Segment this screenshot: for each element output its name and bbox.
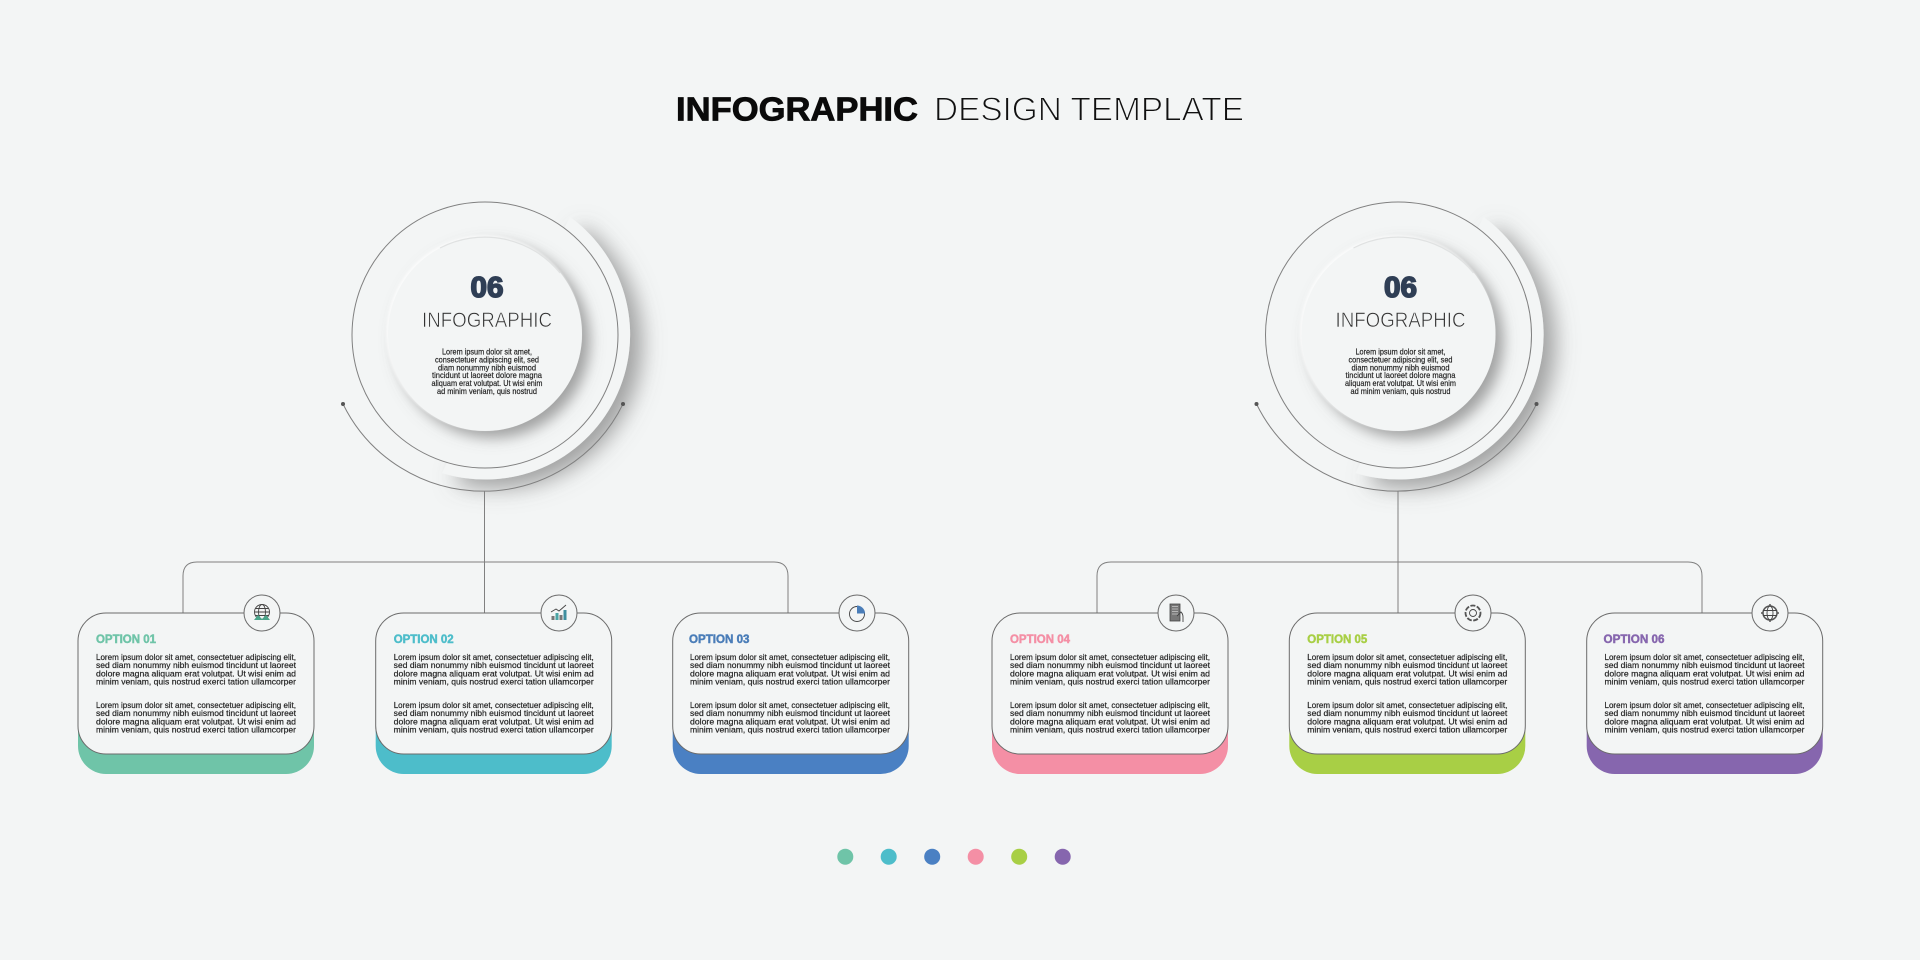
option text: minim veniam, quis nostrud exerci tation ullamcorper <box>96 677 296 687</box>
option text: minim veniam, quis nostrud exerci tation ullamcorper <box>1604 677 1805 687</box>
circle text: aliquam erat volutpat. Ut wisi enim <box>432 379 543 388</box>
icon: globe <box>244 595 280 631</box>
option text: minim veniam, quis nostrud exerci tation ullamcorper <box>690 725 890 735</box>
option text: Lorem ipsum dolor sit amet, consectetuer adipiscing elit, <box>394 652 594 662</box>
legend dots <box>837 849 1071 865</box>
option text: minim veniam, quis nostrud exerci tation ullamcorper <box>1307 677 1507 687</box>
icon: gear ring <box>1455 595 1491 631</box>
card body <box>992 613 1228 754</box>
option text: dolore magna aliquam erat volutpat. Ut wisi enim ad <box>394 668 594 678</box>
crescent disc with shadow <box>1356 217 1544 480</box>
option text: sed diam nonummy nibh euismod tincidunt ut laoreet <box>1604 708 1805 718</box>
bottom arc with end dots <box>1254 402 1538 491</box>
circle text <box>432 348 543 396</box>
inner disc top edge <box>1354 237 1474 273</box>
option text: Lorem ipsum dolor sit amet, consectetuer adipiscing elit, <box>1604 652 1804 662</box>
option text: Lorem ipsum dolor sit amet, consectetuer adipiscing elit, <box>96 700 296 710</box>
card body <box>78 613 314 754</box>
option text: sed diam nonummy nibh euismod tincidunt ut laoreet <box>96 660 297 670</box>
option heading: OPTION 04 <box>1010 634 1071 646</box>
option text: Lorem ipsum dolor sit amet, consectetuer adipiscing elit, <box>1010 700 1210 710</box>
card body <box>376 613 612 754</box>
option text: Lorem ipsum dolor sit amet, consectetuer adipiscing elit, <box>96 652 296 662</box>
number: 06 <box>470 272 504 304</box>
circle text: tincidunt ut laoreet dolore magna <box>1346 371 1456 380</box>
card body <box>1587 613 1823 754</box>
colour band <box>1289 730 1525 774</box>
option text: minim veniam, quis nostrud exerci tation ullamcorper <box>1307 725 1507 735</box>
option text: Lorem ipsum dolor sit amet, consectetuer adipiscing elit, <box>690 652 890 662</box>
option text: dolore magna aliquam erat volutpat. Ut wisi enim ad <box>1307 716 1508 726</box>
option text: dolore magna aliquam erat volutpat. Ut wisi enim ad <box>690 668 890 678</box>
bottom arc with end dots <box>341 402 625 491</box>
option text <box>96 652 297 735</box>
circle text: tincidunt ut laoreet dolore magna <box>432 371 542 380</box>
option text: minim veniam, quis nostrud exerci tation ullamcorper <box>1010 677 1210 687</box>
option text: minim veniam, quis nostrud exerci tation ullamcorper <box>96 725 296 735</box>
option text: minim veniam, quis nostrud exerci tation ullamcorper <box>394 677 594 687</box>
colour band <box>376 730 612 774</box>
option text: Lorem ipsum dolor sit amet, consectetuer adipiscing elit, <box>1307 652 1507 662</box>
panel: option 02 <box>376 595 612 774</box>
option text: sed diam nonummy nibh euismod tincidunt ut laoreet <box>394 660 594 670</box>
option heading: OPTION 05 <box>1307 634 1368 646</box>
panel: option 04 <box>992 595 1228 774</box>
option text: minim veniam, quis nostrud exerci tation ullamcorper <box>394 725 594 735</box>
icon: growth chart <box>541 595 577 631</box>
circle text: diam nonummy nibh euismod <box>438 363 536 372</box>
option text: sed diam nonummy nibh euismod tincidunt ut laoreet <box>96 708 297 718</box>
icon: network globe <box>1752 595 1788 631</box>
option text: minim veniam, quis nostrud exerci tation ullamcorper <box>1604 725 1805 735</box>
panel: option 01 <box>78 595 314 774</box>
left circle group <box>341 202 630 491</box>
option text: sed diam nonummy nibh euismod tincidunt ut laoreet <box>1307 660 1508 670</box>
circle heading: INFOGRAPHIC <box>422 309 552 332</box>
option text <box>690 652 891 735</box>
left connector tree <box>183 491 788 613</box>
option text <box>1307 652 1508 735</box>
outer thin ring <box>352 202 618 468</box>
circle text: ad minim veniam, quis nostrud <box>1350 387 1451 396</box>
option text: sed diam nonummy nibh euismod tincidunt ut laoreet <box>690 660 891 670</box>
circle text: aliquam erat volutpat. Ut wisi enim <box>1345 379 1456 388</box>
option text: Lorem ipsum dolor sit amet, consectetuer adipiscing elit, <box>690 700 890 710</box>
icon: pie chart <box>839 595 875 631</box>
option text: dolore magna aliquam erat volutpat. Ut wisi enim ad <box>690 716 890 726</box>
option text: minim veniam, quis nostrud exerci tation ullamcorper <box>1010 725 1210 735</box>
circle text: ad minim veniam, quis nostrud <box>437 387 537 396</box>
inner raised disc <box>1302 237 1496 431</box>
option text: dolore magna aliquam erat volutpat. Ut wisi enim ad <box>394 716 594 726</box>
title <box>676 92 1244 129</box>
circle heading: INFOGRAPHIC <box>1336 309 1466 332</box>
panel: option 05 <box>1289 595 1525 774</box>
circle text <box>1345 348 1456 396</box>
crescent disc with shadow <box>442 217 630 480</box>
option text: sed diam nonummy nibh euismod tincidunt ut laoreet <box>394 708 594 718</box>
option text: Lorem ipsum dolor sit amet, consectetuer adipiscing elit, <box>1010 652 1210 662</box>
option text: sed diam nonummy nibh euismod tincidunt ut laoreet <box>1307 708 1508 718</box>
title: DESIGN TEMPLATE <box>934 92 1244 129</box>
option text <box>1604 652 1805 735</box>
panel: option 03 <box>673 595 909 774</box>
colour band <box>673 730 909 774</box>
right circle group <box>1254 202 1544 491</box>
card body <box>1289 613 1525 754</box>
option text: dolore magna aliquam erat volutpat. Ut wisi enim ad <box>1604 716 1805 726</box>
option text <box>1010 652 1211 735</box>
circle text: Lorem ipsum dolor sit amet, <box>1356 348 1446 356</box>
circle text: consectetuer adipiscing elit, sed <box>435 356 539 364</box>
colour band <box>78 730 314 774</box>
inner disc top edge <box>440 237 560 273</box>
option text: Lorem ipsum dolor sit amet, consectetuer adipiscing elit, <box>1307 700 1507 710</box>
option heading: OPTION 03 <box>689 634 750 646</box>
option text <box>394 652 594 735</box>
option text: dolore magna aliquam erat volutpat. Ut wisi enim ad <box>96 716 296 726</box>
icon: phone in hand <box>1158 595 1194 631</box>
option heading: OPTION 01 <box>96 634 157 646</box>
option text: dolore magna aliquam erat volutpat. Ut wisi enim ad <box>1307 668 1508 678</box>
option text: sed diam nonummy nibh euismod tincidunt ut laoreet <box>1010 660 1211 670</box>
option text: sed diam nonummy nibh euismod tincidunt ut laoreet <box>1010 708 1211 718</box>
colour band <box>992 730 1228 774</box>
right connector tree <box>1097 491 1702 613</box>
outer thin ring <box>1266 202 1532 468</box>
circle text: Lorem ipsum dolor sit amet, <box>442 348 532 356</box>
title: INFOGRAPHIC <box>676 92 918 129</box>
card body <box>673 613 909 754</box>
option text: dolore magna aliquam erat volutpat. Ut wisi enim ad <box>1010 668 1210 678</box>
inner raised disc <box>388 237 582 431</box>
option text: sed diam nonummy nibh euismod tincidunt ut laoreet <box>1604 660 1805 670</box>
option text: dolore magna aliquam erat volutpat. Ut wisi enim ad <box>96 668 296 678</box>
option text: Lorem ipsum dolor sit amet, consectetuer adipiscing elit, <box>394 700 594 710</box>
option text: sed diam nonummy nibh euismod tincidunt ut laoreet <box>690 708 891 718</box>
circle text: diam nonummy nibh euismod <box>1352 363 1450 372</box>
number: 06 <box>1384 272 1417 304</box>
option text: dolore magna aliquam erat volutpat. Ut wisi enim ad <box>1010 716 1210 726</box>
panel: option 06 <box>1587 595 1823 774</box>
option heading: OPTION 06 <box>1604 634 1664 646</box>
colour band <box>1587 730 1823 774</box>
circle text: consectetuer adipiscing elit, sed <box>1348 356 1453 364</box>
option text: Lorem ipsum dolor sit amet, consectetuer adipiscing elit, <box>1604 700 1804 710</box>
option heading: OPTION 02 <box>394 634 454 646</box>
option text: dolore magna aliquam erat volutpat. Ut wisi enim ad <box>1604 668 1805 678</box>
option text: minim veniam, quis nostrud exerci tation ullamcorper <box>690 677 890 687</box>
